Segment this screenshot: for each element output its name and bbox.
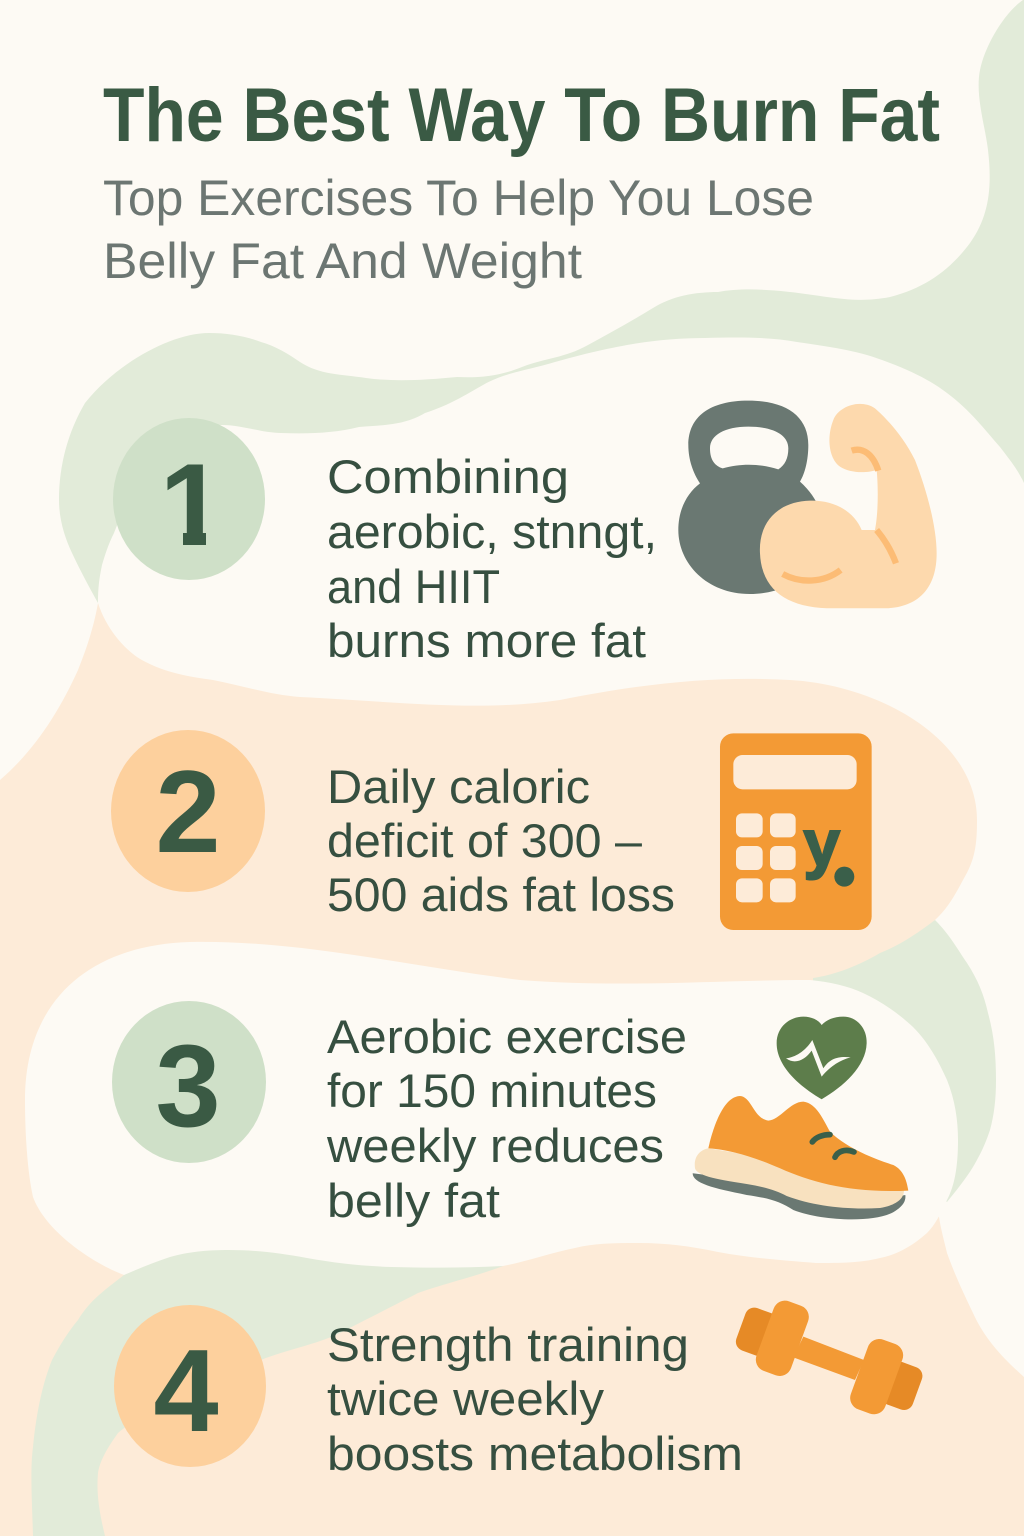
icon: calculator: y <box>803 806 840 880</box>
background: cream lobe behind item 3 <box>25 942 958 1275</box>
item 1 <box>113 401 937 667</box>
background: green wave top <box>59 0 1024 603</box>
subtitle <box>103 170 814 289</box>
icon: kettlebell and flexed arm <box>678 401 937 608</box>
icon: calculator <box>720 733 872 930</box>
item 2 text: deficit of 300 – <box>327 814 643 867</box>
item 4 text: Strength training <box>327 1318 689 1371</box>
subtitle: Top Exercises To Help You Lose <box>103 170 814 226</box>
item 3 text: belly fat <box>327 1174 500 1227</box>
item 1 text: Combining <box>327 450 569 503</box>
number badge 3: 3 <box>155 1020 221 1151</box>
title: The Best Way To Burn Fat <box>103 73 940 158</box>
item 2 text: 500 aids fat loss <box>327 868 675 921</box>
item 2 text <box>327 760 675 921</box>
item 1 text: aerobic, stnngt, <box>327 505 657 558</box>
item 3 text: weekly reduces <box>326 1119 664 1172</box>
item 1 text: burns more fat <box>327 614 646 667</box>
background: peach wave <box>0 603 1024 1536</box>
number badge 2: 2 <box>155 746 221 877</box>
item 1 text: and HIIT <box>327 560 500 613</box>
item 4 text <box>327 1318 743 1480</box>
item 3 <box>112 1001 908 1227</box>
number badge 4: 4 <box>153 1325 219 1456</box>
number badge 1: 1 <box>159 439 225 570</box>
item 2 <box>111 730 872 930</box>
number badge 1 <box>113 418 265 580</box>
background: green wave bottom left <box>31 1240 503 1536</box>
item 1 text <box>327 450 657 667</box>
number badge 2 <box>111 730 265 892</box>
icon: heart and running shoe <box>693 1017 908 1219</box>
item 2 text: Daily caloric <box>327 760 590 813</box>
item 3 text <box>326 1010 687 1227</box>
item 4 text: boosts metabolism <box>327 1427 743 1480</box>
item 3 text: for 150 minutes <box>327 1064 657 1117</box>
number badge 4 <box>114 1305 266 1467</box>
number badge 3 <box>112 1001 266 1163</box>
item 3 text: Aerobic exercise <box>327 1010 687 1063</box>
item 4 <box>114 1297 925 1480</box>
background: green wave right <box>800 920 996 1202</box>
subtitle: Belly Fat And Weight <box>103 233 582 289</box>
item 4 text: twice weekly <box>327 1372 605 1425</box>
icon: dumbbell <box>733 1297 925 1418</box>
